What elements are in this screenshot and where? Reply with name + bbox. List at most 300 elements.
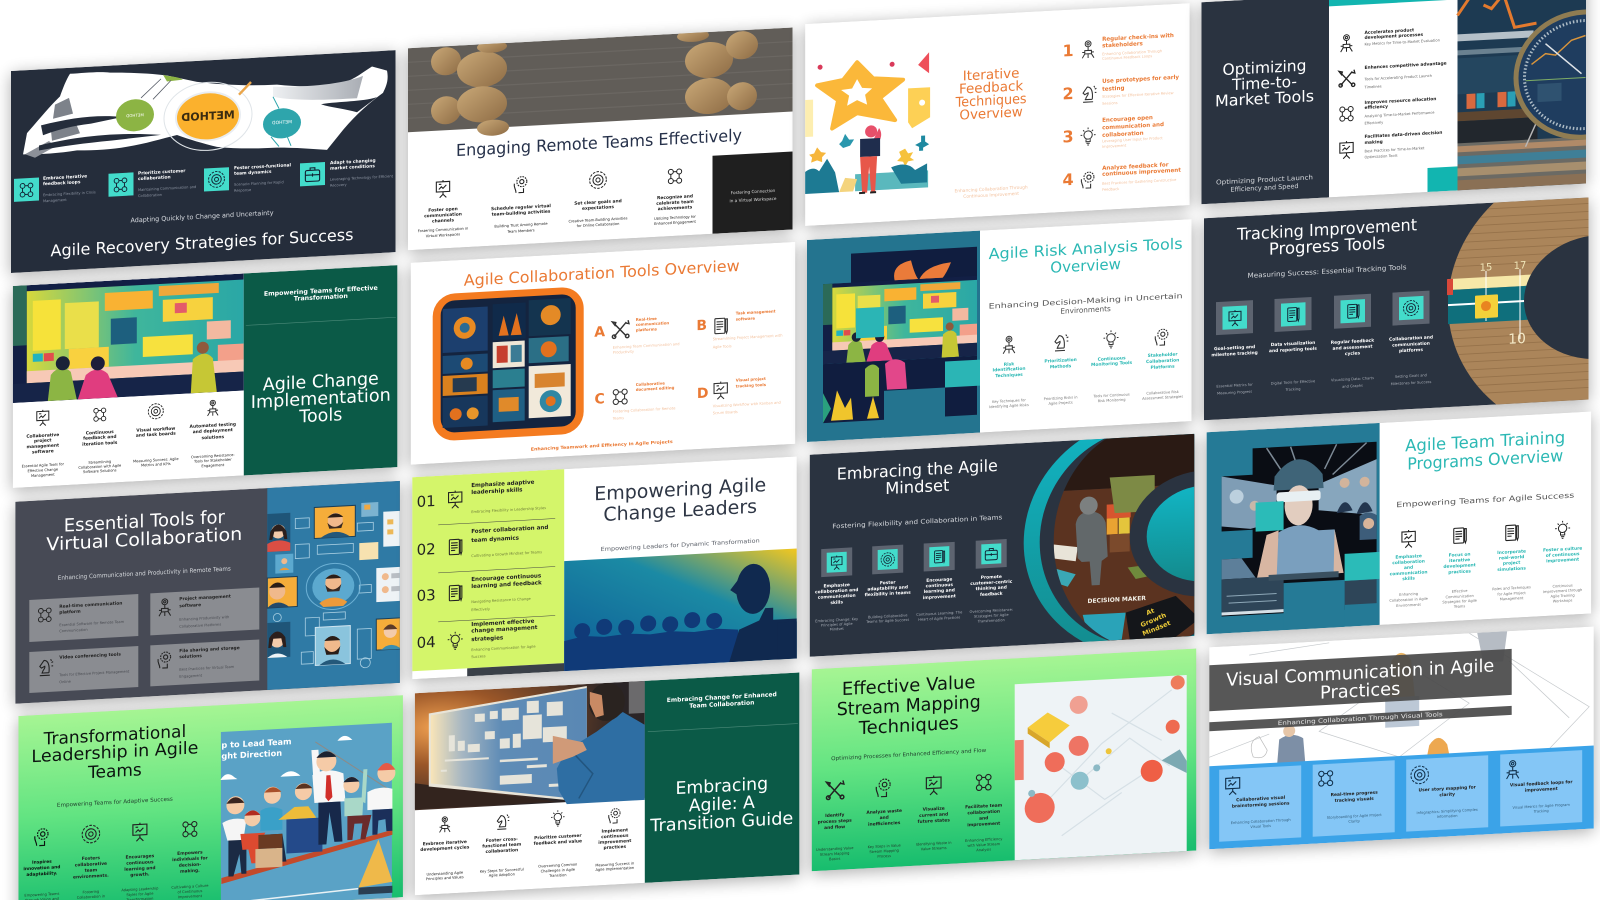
item 4: communication [1392, 341, 1430, 349]
card 2: Collaborative Platforms [179, 623, 221, 629]
item 2 [1337, 62, 1446, 88]
title: Progress Tools [1269, 233, 1385, 259]
item C [595, 380, 676, 422]
item 2: Data visualization [1271, 340, 1315, 348]
subtitle: Empowering Teams for Agile Success [1396, 491, 1574, 509]
item 1: milestone tracking [1211, 350, 1258, 358]
item 4 [1340, 130, 1442, 161]
item 3: expectations [582, 204, 614, 212]
item 2: Agile Projects [1048, 401, 1073, 406]
item 2: and reporting tools [1269, 346, 1317, 354]
item 3: Adapting Leadership [121, 886, 159, 892]
item 2: Prioritization [1044, 357, 1077, 365]
card 2: Enhancing Productivity with [179, 615, 229, 622]
item 2: Focus on [1449, 552, 1471, 559]
item 3: Regular feedback [1331, 338, 1374, 346]
item 3: Set clear goals and [574, 198, 622, 207]
item 3: future states [918, 817, 950, 825]
item 1: Emphasize [823, 582, 850, 589]
title: Engaging Remote Teams Effectively [456, 126, 742, 160]
item 4: improvement [967, 821, 1000, 828]
item 4: improvement [598, 838, 631, 846]
item 2 [78, 407, 122, 474]
item 1: Principles of Agile [821, 622, 853, 628]
panel: Engaging Remote Teams Effectively [408, 24, 794, 253]
title [1216, 60, 1314, 106]
title: Tracking Improvement [1236, 215, 1418, 244]
item 4: Utilizing Technology for [654, 215, 696, 221]
item 1: feedback loops [43, 179, 81, 187]
item 4: continuous improvement [1102, 168, 1181, 178]
item 3: Overcoming Common [538, 862, 577, 869]
item 2: Schedule regular virtual [491, 203, 551, 212]
photo: ring with statue [1024, 409, 1280, 663]
item 2: Continuous [86, 429, 114, 437]
panel: Agile Recovery Strategies for Success [11, 50, 396, 276]
item 3: Encourages [126, 853, 155, 861]
item 1 [22, 409, 64, 479]
item 2: adaptability and [867, 584, 908, 593]
title: Teams [87, 760, 142, 783]
item 3: Visual workflow [136, 426, 175, 434]
item 3: Analyzing Time-to-Market Performance [1364, 111, 1435, 118]
item 2: Collaboration with Agile [78, 464, 122, 470]
item 4: Improvement [178, 894, 203, 899]
item 4: Agile Training [1550, 593, 1575, 599]
item 1: adaptability. [26, 870, 58, 878]
card 1: Essential Software for Remote Team [59, 620, 125, 627]
title: Agile Recovery Strategies for Success [50, 225, 353, 260]
item 04 [417, 619, 538, 662]
subtitle: Fostering Flexibility and Collaboration in Teams [832, 513, 1003, 530]
item 2: Building Collaborative [868, 613, 908, 620]
item 3 [569, 170, 628, 229]
item 2: team-building activities [492, 209, 551, 218]
item 1: Understanding Value [816, 846, 854, 852]
item 3: communication and [1102, 122, 1164, 131]
item C: document editing [636, 385, 675, 392]
sketch illustration [1209, 627, 1589, 767]
item 3: real-world [1499, 554, 1524, 561]
card 2: tracking visuals [1335, 796, 1374, 804]
card 4: Engagement [179, 674, 203, 679]
item A: Real-time [636, 316, 657, 322]
subtitle: Enhancing Decision-Making in Uncertain [989, 291, 1183, 311]
item 2 [73, 824, 109, 900]
item 4: Optimization Tools [1364, 154, 1398, 159]
item 4: Continuous [1552, 583, 1573, 589]
item 1: Key Metrics for Time-to-Market Evaluation [1364, 38, 1440, 46]
item 4: platforms [1399, 347, 1423, 354]
item 3: cycles [1345, 350, 1360, 357]
title: Tools [298, 405, 342, 428]
item 1: innovation and [23, 864, 60, 872]
item 3: Visualizing Data: Charts [1331, 376, 1374, 382]
subtitle: Efficiency and Speed [1231, 182, 1298, 194]
subtitle [954, 185, 1028, 198]
item 2 [491, 175, 551, 235]
panel: Transformational Leadership in Agile Teams [18, 695, 403, 900]
item 4: Strategies for Agile [974, 613, 1009, 619]
item 1: Effective Change [28, 468, 59, 473]
item 2: collaboration [138, 174, 171, 182]
image: cartoon team on a slope: p to Lead Team [221, 736, 292, 750]
item 3: simulations [1497, 565, 1526, 573]
item A: A [594, 324, 605, 341]
title [594, 474, 766, 526]
item 1: Empowering Teams [24, 892, 59, 898]
item 1: Identifying Agile Risks [989, 403, 1029, 409]
title: Techniques [955, 91, 1027, 111]
item 2: testing [1102, 86, 1124, 93]
item 3 [1331, 294, 1374, 389]
subtitle: Measuring Success: Essential Tracking Tools [1248, 263, 1407, 280]
item 1: Virtual Workspaces [426, 232, 460, 238]
item 4: Platforms [1151, 364, 1175, 371]
item 1: Collaborative [26, 432, 59, 440]
item 3: and Graphs [1342, 384, 1363, 389]
item 2: Enhances competitive advantage [1364, 61, 1447, 71]
image: process map with nodes [1015, 675, 1187, 860]
image: cartoon team on a slope: ght Direction [221, 748, 282, 761]
item 2 [108, 170, 196, 198]
item 4 [300, 158, 393, 187]
item 4: Recognize and [657, 193, 693, 201]
card 2 [1313, 760, 1395, 837]
item 3: learning and [924, 587, 955, 595]
blue band [1209, 745, 1594, 849]
hero brush illustration: METHOD [126, 112, 144, 118]
card 1: platform [59, 609, 81, 616]
item C: Fostering Collaboration for Remote [613, 406, 676, 414]
item 3 [133, 402, 179, 468]
card 3 [1406, 755, 1488, 832]
item 4: celebrate team [656, 199, 694, 207]
item 3: Leveraging User Input for Product [1102, 136, 1163, 143]
item 1 [1341, 26, 1440, 52]
photo: wooden figures [408, 24, 793, 140]
item 2: iterative [1449, 557, 1470, 564]
item 3: Identifying Waste in [916, 841, 952, 847]
title: Stream Mapping [837, 692, 981, 720]
item 4: Collaborative Risk [1146, 390, 1180, 396]
title: Transformational [43, 722, 186, 750]
item 1 [1063, 33, 1174, 63]
card 4: Visual feedback loops for [1510, 779, 1573, 789]
item 3 [916, 775, 952, 852]
item 3: Improvement [1102, 144, 1127, 149]
item 4: Best Practices for Gathering Constructive [1102, 178, 1177, 186]
item 1: skills [1402, 575, 1415, 582]
title: Feedback [959, 78, 1023, 98]
item 2: Methods [1050, 363, 1072, 370]
item 02 [417, 525, 548, 561]
item 3: learning and [124, 865, 156, 873]
panel: Tracking Improvement Progress Tools [1204, 147, 1600, 459]
item 1: management [27, 442, 59, 450]
item 4: Setting Goals and [1395, 373, 1427, 379]
item 3: and task boards [136, 431, 176, 439]
item 4: collaboration [967, 809, 1000, 816]
item 4: Measuring Success in [595, 861, 634, 868]
item B: Agile Tools [713, 344, 732, 349]
item 3: Management [1500, 596, 1524, 601]
item 3: team dynamics [234, 169, 272, 177]
item 2: Key Steps for Successful [480, 867, 524, 874]
item 1: Continuous Feedback Loops [1102, 54, 1152, 61]
item 3 [1091, 329, 1133, 404]
callout box: Fostering Connection [731, 188, 776, 195]
item 1: communication [1390, 569, 1428, 577]
item 2 [480, 814, 524, 878]
item 4: Empowers [177, 850, 203, 857]
item 1: Basics [829, 857, 841, 861]
item 1: Identification [992, 366, 1026, 373]
card 4: solutions [179, 653, 202, 660]
title: Embracing [675, 774, 768, 799]
item 3: continuous [126, 859, 154, 867]
item 1: Fostering Communication in [418, 227, 468, 233]
item 01: Embracing Flexibility in Leadership Styles [471, 506, 546, 514]
photo: man at planning board [415, 681, 645, 812]
item 2: Teams [1453, 604, 1465, 609]
item B: B [696, 318, 707, 334]
item 4: Agile Implementation [595, 866, 634, 872]
card 1: Collaborative visual [1236, 795, 1286, 803]
item 4: Leveraging Technology for Efficient [330, 174, 394, 182]
item 1: Risk [1004, 361, 1014, 368]
footer line: Enhancing Teamwork and Efficiency in Agile Projects [531, 439, 673, 453]
item 3: Heart of Agile Practices [918, 616, 960, 622]
item 01: 01 [417, 492, 436, 511]
item 1: project [34, 437, 52, 444]
hero brush illustration [23, 66, 388, 158]
item 1: Techniques [995, 372, 1023, 379]
item A: Enhancing Team Communication and [613, 342, 680, 350]
item 1: Stream Mapping [820, 851, 849, 857]
item 1: Goal-setting and [1214, 344, 1255, 352]
item 3: Continuous [1098, 355, 1126, 363]
item 4: practices [603, 844, 627, 851]
item 1: stakeholders [1102, 41, 1144, 49]
item 3: Foster cross-functional [234, 162, 291, 171]
item 01 [417, 479, 546, 517]
item 4 [970, 539, 1013, 624]
item 1: communication [424, 211, 462, 219]
title: Overview [959, 104, 1023, 124]
item C: Collaborative [636, 380, 665, 387]
item 4 [190, 399, 236, 469]
item 4: and [979, 815, 988, 822]
card 3: Tools for Effective Project Management [58, 669, 130, 677]
panel: Essential Tools for Virtual Collaboration [15, 481, 402, 707]
item 4 [654, 168, 696, 226]
item 4 [595, 808, 634, 872]
item 03 [417, 573, 542, 615]
item C: Teams [612, 416, 624, 421]
item 1: Emphasize [1395, 553, 1422, 561]
item 1: Embracing Change: Key [815, 617, 859, 623]
item 4: decision- [179, 862, 201, 869]
item 1: Embracing Flexibility in Crisis [43, 190, 96, 197]
item 03: 03 [417, 586, 436, 605]
title: Virtual Collaboration [46, 524, 242, 556]
item 03: Encourage continuous [471, 573, 542, 583]
item 1 [1211, 300, 1258, 396]
item 1: and [1404, 565, 1413, 571]
illustration: kanban board [13, 273, 244, 403]
card 3: clarity [1439, 791, 1455, 798]
item 4: Assessment Strategies [1142, 395, 1183, 401]
item 1: Identify [825, 812, 844, 819]
item 2: Stream Mapping [869, 849, 899, 854]
subtitle: Enhancing Collaboration Through [954, 184, 1028, 194]
item 3: Visualize [923, 806, 945, 813]
title [956, 68, 1026, 120]
item 2: Analyze waste [866, 808, 902, 816]
item 4: Cultivating a Culture [171, 884, 209, 890]
title: Agile Collaboration Tools Overview [464, 257, 740, 290]
item 4: Facilitates data-driven decision [1364, 130, 1442, 140]
item 2: 2 [1063, 84, 1074, 104]
card 1: Communication [59, 628, 88, 633]
item 1: Mindset [830, 627, 844, 632]
title [1405, 428, 1565, 474]
item 1: Inspires [32, 859, 52, 866]
image: cartoon team on a slope [220, 723, 395, 900]
item 3: Roles and Techniques [1492, 585, 1531, 591]
item 1: Principles and Values [426, 875, 464, 881]
item 02: team dynamics [471, 535, 520, 544]
title [1236, 215, 1418, 261]
card 3: Information [1437, 814, 1458, 819]
teal accents [1329, 0, 1458, 197]
item 4: thinking and [976, 585, 1007, 592]
item 1: process steps [818, 818, 852, 825]
item 1: Enhancing [1399, 592, 1418, 597]
item 4: with Value Stream [967, 842, 1001, 848]
image: infographic collage [433, 286, 584, 442]
subtitle: Adapting Quickly to Change and Uncertainty [130, 209, 274, 225]
item 3: Styles for Agile [126, 892, 154, 897]
item 4: Stakeholder [1148, 351, 1178, 359]
item 1 [815, 547, 859, 632]
title: Agile Change [263, 369, 379, 395]
item 4 [965, 774, 1003, 853]
item 03: Effectively [471, 607, 491, 612]
item 3: feedback and value [534, 838, 582, 847]
item 1 [420, 815, 470, 882]
item 04: change management [471, 625, 538, 635]
item 3 [1064, 116, 1164, 148]
item 1: Embrace iterative [423, 839, 467, 847]
item 3: improvement [923, 593, 956, 601]
item D [697, 375, 781, 416]
item 1: development processes [1364, 32, 1423, 41]
item 3: Metrics and KPIs [141, 462, 171, 468]
hero brush illustration: METHOD [272, 119, 292, 126]
item 4: Feedback [1102, 187, 1120, 192]
title: Agile Risk Analysis Tools [989, 235, 1183, 263]
item 2 [866, 778, 902, 859]
illustration: video call faces [267, 481, 402, 690]
panel: Agile Risk Analysis Tools Overview [807, 219, 1192, 445]
item 2: Strategies for Effective Iterative Review [1102, 91, 1174, 99]
item A: communication [636, 320, 669, 327]
item 1: collaboration [1392, 558, 1425, 566]
hero brush illustration: METHOD [181, 108, 235, 124]
card 4: Tracking [1533, 809, 1549, 814]
item 1: and flow [824, 824, 845, 831]
photo: wood dial: 17 [1514, 260, 1526, 272]
item 2: collaborative [75, 861, 107, 868]
item 1 [1389, 529, 1429, 608]
lime column [412, 469, 564, 679]
item 4: Overcoming Resistance: [970, 608, 1013, 614]
item 3: current and [919, 811, 948, 819]
item 2: Tracking [1285, 387, 1300, 392]
card 2: software [179, 602, 201, 609]
item 02: Foster collaboration and [471, 525, 548, 535]
item 4: individuals for [172, 855, 209, 863]
card 2: Real-time progress [1331, 790, 1378, 798]
item 1: Embrace iterative [43, 173, 87, 182]
item 4: Implement [601, 827, 628, 835]
item 3: Measuring Success: Agile [133, 457, 179, 463]
item 3: growth. [130, 871, 150, 878]
title [989, 235, 1183, 280]
subtitle [1216, 174, 1312, 192]
card 4: improvement [1525, 786, 1558, 794]
item 1: Essential Agile Tools for [22, 462, 64, 469]
item 4: Facilitate team [965, 802, 1003, 810]
item 2: Process [877, 854, 891, 859]
item 03: learning and feedback [471, 580, 542, 590]
panel: Empowering Agile Change Leaders [412, 456, 797, 682]
item 3: Transition [548, 873, 566, 878]
item 3: and assessment [1333, 344, 1372, 352]
photo: ring with statue: DECISION MAKER [1087, 595, 1146, 605]
item 4: making. [180, 868, 200, 875]
subtitle: Enhancing Communication and Productivity in Remote Teams [58, 566, 231, 582]
card 2: Storyboarding for Agile Project [1327, 813, 1382, 820]
item 2: iteration tools [82, 440, 118, 448]
title [649, 773, 793, 837]
panel: Effective Value Stream Mapping Techniques [812, 648, 1197, 874]
subtitle [667, 691, 777, 711]
item 4: Analyze feedback for [1102, 162, 1169, 172]
item 04: Enhancing Communication for Agile [471, 645, 536, 652]
item 2 [1269, 297, 1317, 393]
item 1: development cycles [420, 844, 470, 853]
item 4: Collaboration and [1389, 334, 1433, 343]
item 2: Teams for Agile Success [865, 618, 909, 624]
item 2: Fostering [83, 890, 99, 895]
card 4: File sharing and storage [179, 645, 240, 654]
item 3: Monitoring Tools [1091, 360, 1133, 368]
item 2: Effective [1452, 589, 1468, 594]
item 2: Agile Adoption [489, 872, 515, 878]
green column [645, 672, 800, 883]
item 3: Creative Team-Building Activities [569, 216, 628, 224]
item 4: solutions [201, 434, 224, 441]
card 4: Best Practices for Virtual Team [179, 665, 235, 672]
subtitle: Empowering Teams for Adaptive Success [57, 797, 173, 809]
item B: Task management [736, 308, 776, 316]
card 3: User story mapping for [1419, 784, 1477, 793]
item 1: Regular check-ins with [1102, 33, 1174, 43]
title bar [1209, 649, 1512, 711]
